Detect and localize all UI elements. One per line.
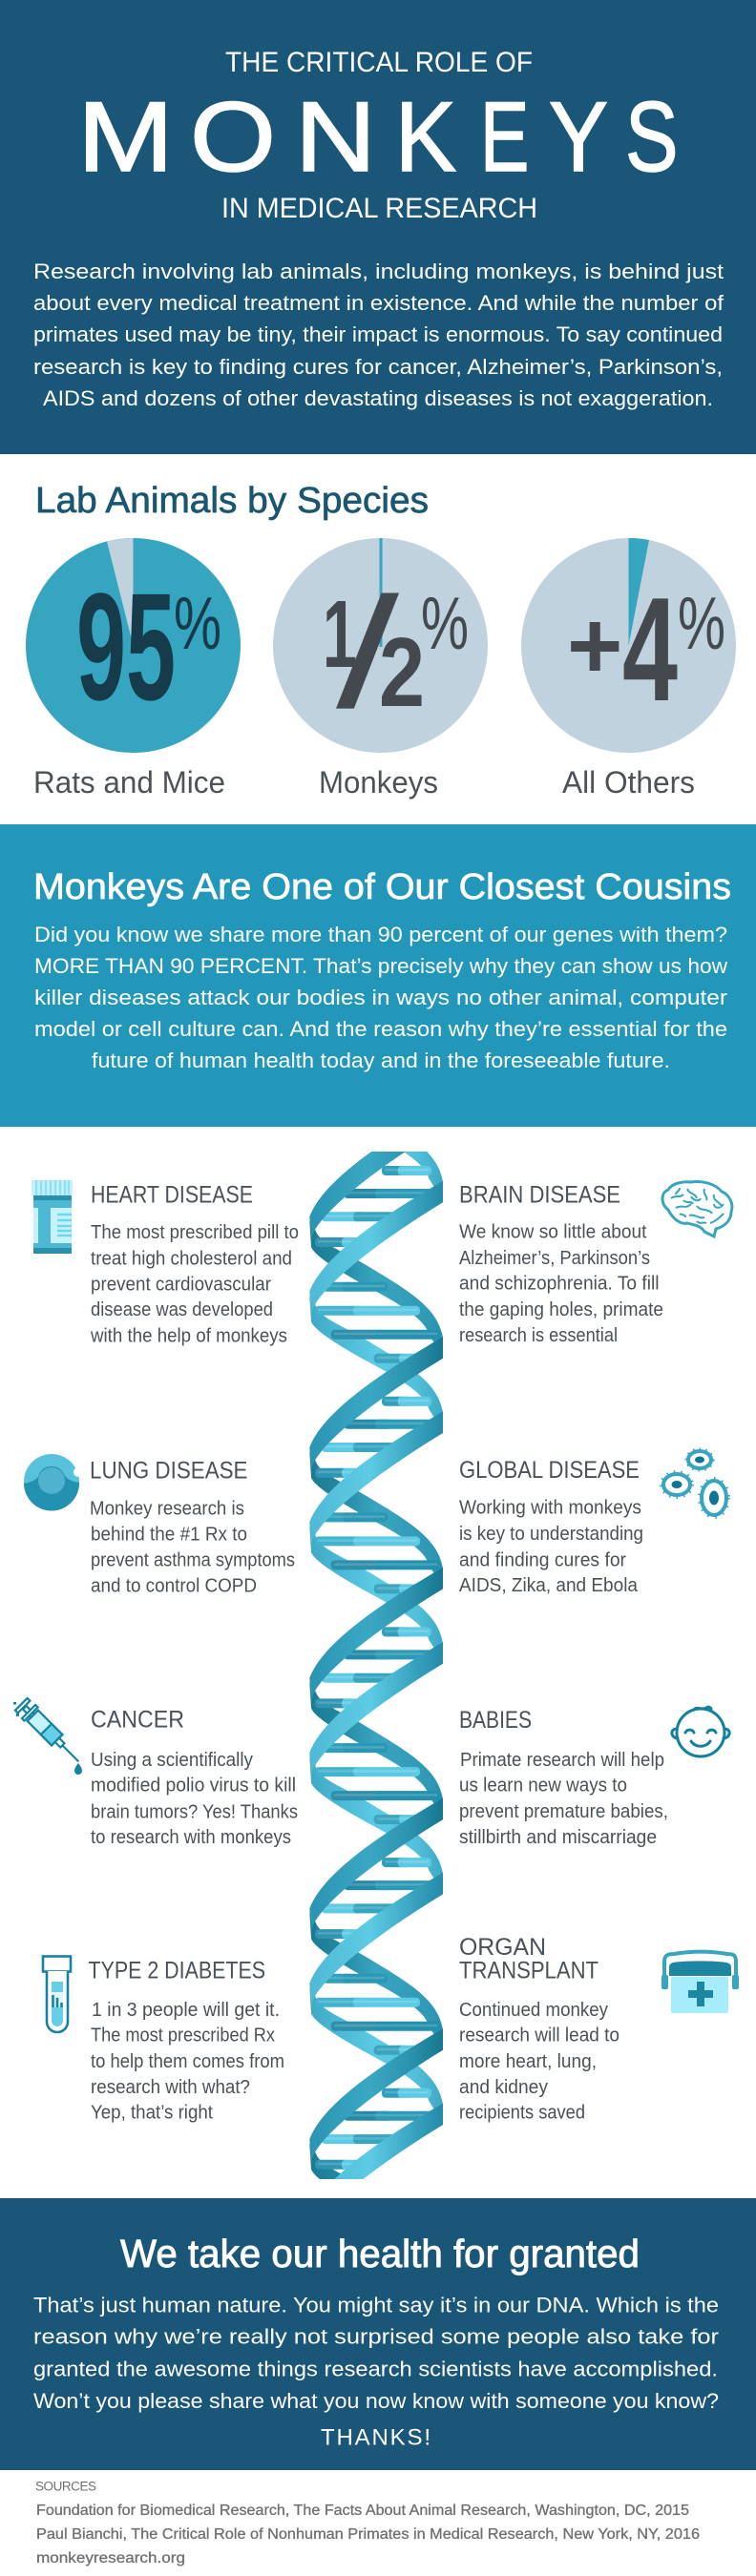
item: cancer xyxy=(13,1697,298,1848)
text: brain disease: Alzheimer’s, Parkinson’s xyxy=(459,1248,650,1269)
text: organ transplant: more heart, lung, xyxy=(459,2051,597,2072)
pie chart: all others +4%: + xyxy=(567,592,622,699)
text: brain disease: research is essential xyxy=(459,1325,618,1346)
heading: we take our health for granted: We take our health for granted xyxy=(120,2232,640,2275)
text: lung disease xyxy=(90,1498,295,1596)
source lines: Paul Bianchi, The Critical Role of Nonhuman Primates in Medical Research, New York, NY, 2016 xyxy=(36,2526,700,2543)
text: type 2 diabetes: 1 in 3 people will get it. xyxy=(92,2000,280,2021)
heading: lung disease: LUNG DISEASE xyxy=(90,1457,248,1484)
intro text: Research involving lab animals, including monkeys, is behind just xyxy=(33,260,724,283)
title: monkeys: N xyxy=(295,82,376,193)
text: babies: us learn new ways to xyxy=(459,1776,627,1797)
icon: test tube xyxy=(43,1956,71,2032)
heading: type 2 diabetes: TYPE 2 DIABETES xyxy=(88,1957,265,1984)
item: brain disease xyxy=(459,1181,732,1346)
text: heart disease: prevent cardiovascular xyxy=(91,1275,271,1296)
text: organ transplant: Continued monkey xyxy=(459,2000,608,2021)
text: type 2 diabetes: to help them comes from xyxy=(91,2051,284,2072)
cousins body text: killer diseases attack our bodies in ways no other animal, computer xyxy=(34,986,727,1009)
text: type 2 diabetes xyxy=(91,2000,284,2124)
icon: baby face xyxy=(672,1707,729,1756)
pie chart: monkeys 1/2%: 1 xyxy=(323,581,357,688)
thanks: THANKS! xyxy=(321,2425,430,2451)
title: in medical research: IN MEDICAL RESEARCH xyxy=(221,193,537,224)
panel: header xyxy=(0,0,756,454)
text: heart disease: treat high cholesterol and xyxy=(91,1249,292,1270)
text: babies: prevent premature babies, xyxy=(459,1801,668,1822)
text: babies: Primate research will help xyxy=(460,1750,664,1771)
text: global disease: AIDS, Zika, and Ebola xyxy=(459,1575,639,1596)
sources xyxy=(35,2480,700,2566)
heading: closest cousins: Monkeys Are One of Our Closest Cousins xyxy=(33,867,731,907)
cousins body text: model or cell culture can. And the reason why they’re essential for the xyxy=(34,1017,727,1041)
text: cancer: to research with monkeys xyxy=(91,1827,291,1848)
closing text: Won’t you please share what you now know with someone you know? xyxy=(33,2389,719,2413)
text: babies xyxy=(459,1750,668,1848)
label: all others: All Others xyxy=(562,765,695,800)
pie chart: all others +4%: % xyxy=(678,581,725,665)
label: rats and mice: Rats and Mice xyxy=(33,765,225,800)
text: organ transplant: recipients saved xyxy=(459,2103,585,2124)
text: heart disease: The most prescribed pill to xyxy=(91,1222,299,1243)
pie chart: monkeys 1/2%: / xyxy=(336,565,399,740)
cousins body text xyxy=(34,923,727,1072)
pie chart: all others +4% xyxy=(521,538,736,753)
closing text: reason why we’re really not surprised some people also take for xyxy=(33,2325,719,2349)
text: brain disease xyxy=(459,1221,663,1346)
text: global disease: Working with monkeys xyxy=(459,1498,641,1519)
text: organ transplant: and kidney xyxy=(459,2077,548,2098)
text: heart disease xyxy=(90,1222,299,1347)
heading: heart disease: HEART DISEASE xyxy=(91,1182,253,1209)
title: the critical role of: THE CRITICAL ROLE OF xyxy=(225,47,533,78)
text: lung disease: Monkey research is xyxy=(90,1498,244,1519)
text: brain disease: the gaping holes, primate xyxy=(459,1299,663,1320)
sources heading: SOURCES xyxy=(35,2480,96,2494)
text: cancer xyxy=(91,1750,298,1848)
pie chart: all others +4%: 4 xyxy=(622,567,678,732)
cousins body text: Did you know we share more than 90 percent of our genes with them? xyxy=(34,923,727,946)
title: monkeys: E xyxy=(480,82,529,193)
heading: global disease: GLOBAL DISEASE xyxy=(459,1457,640,1484)
intro text: research is key to finding cures for cancer, Alzheimer’s, Parkinson’s, xyxy=(33,355,723,379)
icon: pill bottle xyxy=(32,1180,73,1254)
heading: organ transplant: TRANSPLANT xyxy=(459,1957,598,1984)
pie chart: monkeys 1/2%: % xyxy=(421,581,469,665)
label: monkeys: Monkeys xyxy=(319,765,438,800)
icon: medical cooler xyxy=(662,1952,739,2013)
item: global disease xyxy=(459,1449,729,1596)
heading: organ transplant xyxy=(459,1934,598,1984)
text: cancer: brain tumors? Yes! Thanks xyxy=(91,1801,298,1822)
icon: syringe xyxy=(13,1697,85,1775)
title: monkeys: S xyxy=(625,82,678,193)
title: monkeys: M xyxy=(77,82,174,193)
text: organ transplant xyxy=(459,2000,620,2124)
text: cancer: modified polio virus to kill xyxy=(91,1776,296,1797)
heading: lab animals by species: Lab Animals by Species xyxy=(35,481,429,521)
heading: cancer: CANCER xyxy=(91,1706,184,1733)
closing text xyxy=(33,2293,719,2413)
intro text xyxy=(33,260,724,410)
heading: babies: BABIES xyxy=(459,1707,532,1734)
pie chart: rats and mice 95%: % xyxy=(174,581,221,665)
item: lung disease xyxy=(24,1454,295,1596)
heading: organ transplant: ORGAN xyxy=(459,1934,546,1961)
intro text: AIDS and dozens of other devastating diseases is not exaggeration. xyxy=(43,386,713,410)
icon: brain xyxy=(662,1181,732,1236)
text: global disease: is key to understanding xyxy=(459,1524,643,1545)
heading: brain disease: BRAIN DISEASE xyxy=(459,1182,620,1209)
text: type 2 diabetes: research with what? xyxy=(91,2077,250,2098)
intro text: about every medical treatment in existence. And while the number of xyxy=(33,291,724,315)
source lines xyxy=(36,2503,700,2566)
text: cancer: Using a scientifically xyxy=(91,1750,253,1771)
icon: viruses xyxy=(661,1449,729,1517)
item: type 2 diabetes xyxy=(43,1956,284,2124)
title: monkeys: Y xyxy=(549,82,608,193)
text: lung disease: and to control COPD xyxy=(91,1575,257,1596)
title: monkeys: O xyxy=(190,82,276,193)
text: organ transplant: research will lead to xyxy=(459,2025,620,2046)
text: brain disease: and schizophrenia. To fill xyxy=(459,1274,659,1295)
text: global disease xyxy=(459,1498,643,1596)
item: heart disease xyxy=(32,1180,299,1347)
text: brain disease: We know so little about xyxy=(459,1221,647,1242)
item: babies xyxy=(459,1707,729,1848)
icon: lung xyxy=(24,1454,83,1510)
panel: closing message xyxy=(0,2198,756,2470)
text: type 2 diabetes: Yep, that’s right xyxy=(91,2103,213,2124)
panel: lab animals by species xyxy=(26,481,736,800)
item: organ transplant xyxy=(459,1934,739,2124)
text: lung disease: behind the #1 Rx to xyxy=(91,1524,247,1545)
panel: closest cousins xyxy=(0,824,756,1127)
source lines: monkeyresearch.org xyxy=(36,2550,185,2566)
cousins body text: future of human health today and in the foreseeable future. xyxy=(92,1049,670,1072)
source lines: Foundation for Biomedical Research, The Facts About Animal Research, Washington, DC, 2015 xyxy=(36,2503,689,2519)
pie chart: monkeys 1/2% xyxy=(273,538,488,753)
text: heart disease: with the help of monkeys xyxy=(90,1326,287,1347)
pie chart: monkeys 1/2%: 2 xyxy=(379,617,425,727)
text: global disease: and finding cures for xyxy=(459,1550,626,1571)
text: babies: stillbirth and miscarriage xyxy=(459,1827,657,1848)
title: monkeys: K xyxy=(395,82,456,193)
title: monkeys xyxy=(77,82,678,193)
cousins body text: MORE THAN 90 PERCENT. That’s precisely why they can show us how xyxy=(34,954,727,978)
closing text: granted the awesome things research scientists have accomplished. xyxy=(33,2358,718,2381)
text: lung disease: prevent asthma symptoms xyxy=(91,1550,295,1571)
intro text: primates used may be tiny, their impact is enormous. To say continued xyxy=(33,322,723,346)
text: heart disease: disease was developed xyxy=(91,1299,273,1320)
pie chart: rats and mice 95%: 95 xyxy=(76,561,176,732)
dna double helix xyxy=(309,1152,443,2179)
text: type 2 diabetes: The most prescribed Rx xyxy=(91,2025,275,2046)
closing text: That’s just human nature. You might say it’s in our DNA. Which is the xyxy=(33,2293,719,2316)
pie chart: rats and mice 95% xyxy=(26,538,241,753)
